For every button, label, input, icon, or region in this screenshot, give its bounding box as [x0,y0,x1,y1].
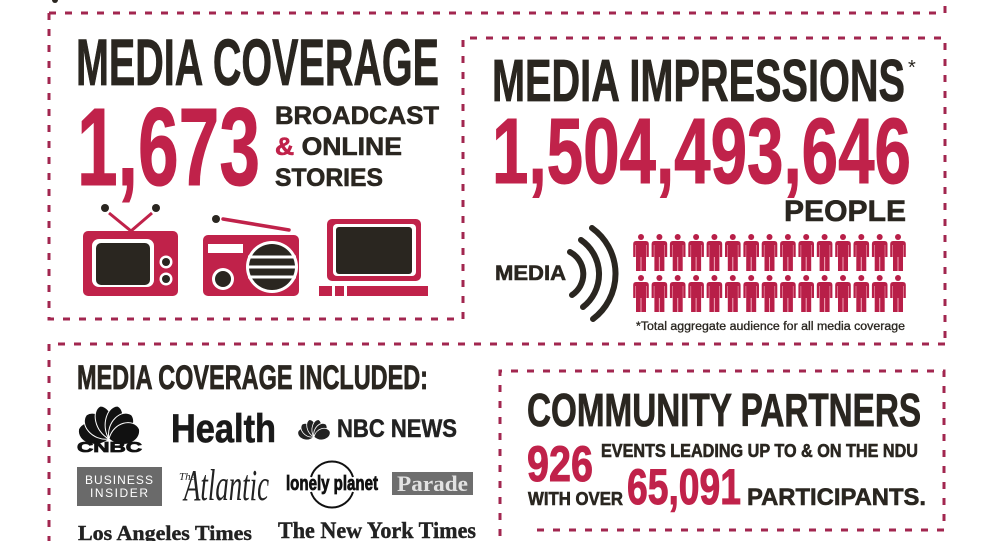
text: events leading up to and on the NDU: EVENTS LEADING UP TO & ON THE NDU [601,441,918,461]
icon: broadcast waves [570,228,616,319]
logo: Business Insider: INSIDER [90,486,148,500]
heading: media coverage included: MEDIA COVERAGE INCLUDED: [77,359,428,397]
text: broadcast and online stories: & ONLINE [275,133,402,161]
asterisk: * [908,57,916,79]
number: 65,091: 65,091 [627,459,741,515]
number: 1,673: 1,673 [77,86,260,209]
logo: Lonely Planet: lonely planet [286,473,378,495]
dashed frame: impressions panel [463,38,945,344]
text: participants: PARTICIPANTS. [747,484,926,511]
number: 926: 926 [527,436,593,492]
heading: media coverage: MEDIA COVERAGE [76,25,439,99]
clipped dot at top edge [52,0,58,3]
icon: radio [203,215,299,296]
logo: Lonely Planet [286,462,378,507]
logo: NBC News: NBC NEWS [337,415,457,443]
logo: The Atlantic: The [179,471,196,483]
logo: Business Insider [77,467,162,506]
panel: media coverage [76,25,439,296]
logo: Business Insider: BUSINESS [85,473,153,487]
dashed frame: top section [49,0,945,319]
dashed frame: community partners [500,371,944,536]
icon: laptop [319,219,428,296]
text: broadcast and online stories: STORIES [275,164,383,192]
text: broadcast and online stories: BROADCAST [275,102,439,130]
icon array: people [633,234,906,312]
logo: NBC News [296,415,457,443]
label: people: PEOPLE [784,195,906,228]
logo: CNBC [75,404,143,456]
dashed divider and lower-left frame [49,344,945,541]
logo: Health: Health [171,407,276,451]
text: with over: WITH OVER [528,489,623,509]
logo: The Atlantic [179,461,269,510]
text: broadcast and online stories [275,102,439,192]
icon: television [83,204,178,296]
panel: community partners [527,384,926,515]
logo: CNBC: CNBC [77,439,142,456]
panel: media coverage included [75,359,476,541]
logo: Parade: Parade [397,471,468,496]
label: media: MEDIA [495,262,566,285]
logo: The Atlantic: Atlantic [182,461,269,510]
footnote: *Total aggregate audience for all media coverage [636,321,905,333]
panel: media impressions [492,48,916,333]
